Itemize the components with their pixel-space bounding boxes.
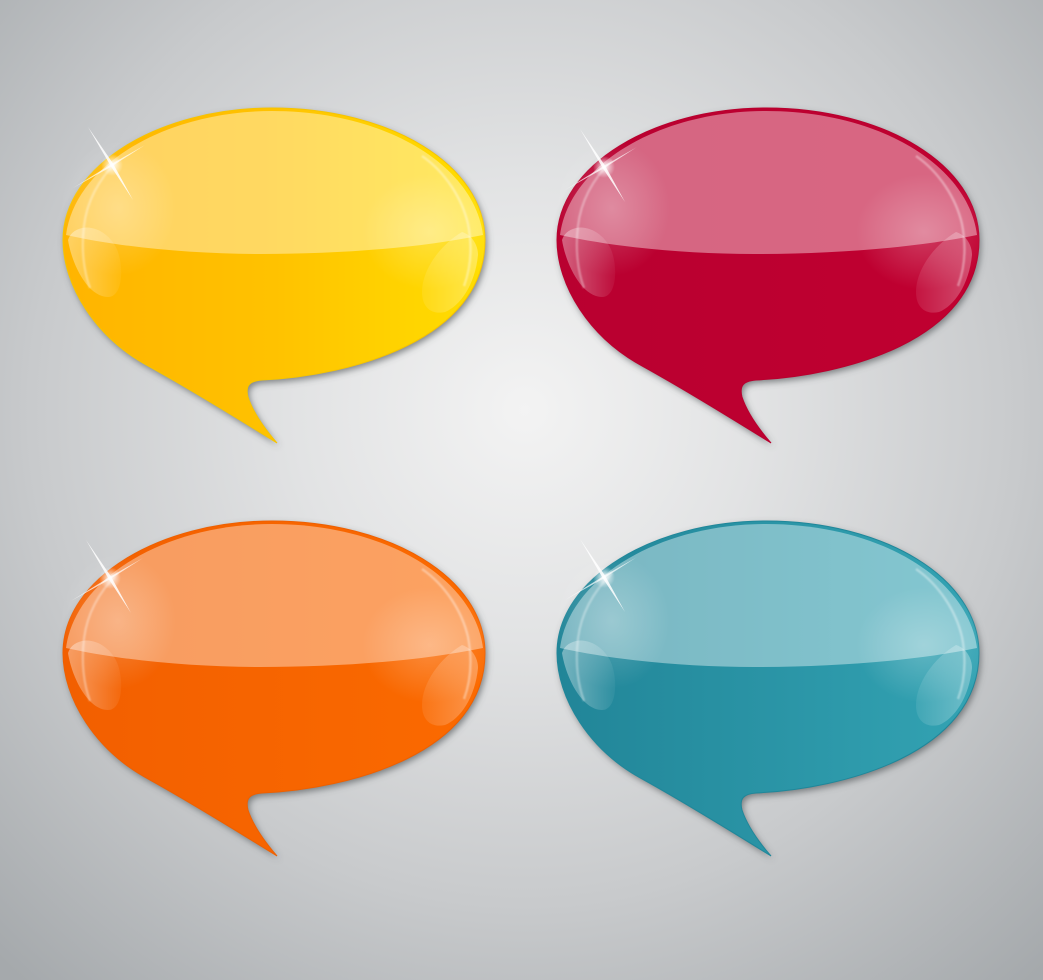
speech bubble: teal (554, 521, 992, 859)
icon: crimson sparkle (565, 129, 637, 202)
yellow bubble body (63, 108, 485, 443)
orange bubble body (63, 521, 485, 856)
icon: yellow sparkle (73, 127, 145, 200)
yellow upper gloss band (66, 111, 483, 254)
orange upper gloss band (66, 524, 483, 667)
teal bubble body (557, 521, 979, 856)
teal upper gloss band (560, 524, 977, 667)
speech bubble: crimson (554, 108, 992, 446)
icon: teal sparkle (565, 539, 637, 612)
crimson bubble body (557, 108, 979, 443)
speech bubble: orange (60, 521, 498, 859)
icon: orange sparkle (71, 540, 143, 613)
speech bubble: yellow (60, 108, 498, 446)
crimson upper gloss band (560, 111, 977, 254)
